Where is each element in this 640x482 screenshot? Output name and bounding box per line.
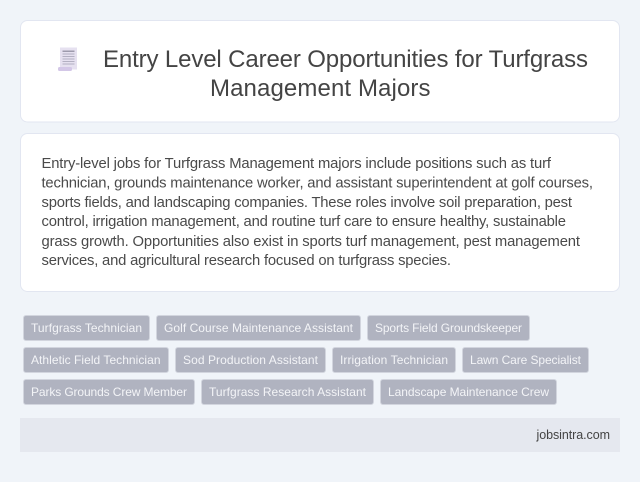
tag: Turfgrass Research Assistant: Turfgrass Research Assistant	[209, 385, 367, 399]
panel: title card	[20, 20, 620, 122]
tag: Sports Field Groundskeeper	[368, 316, 530, 340]
tag: Landscape Maintenance Crew	[380, 380, 556, 404]
tag list	[24, 316, 588, 404]
tag: Irrigation Technician: Irrigation Technician	[340, 353, 448, 367]
description text: grass growth. Opportunities also exist in sports turf management, pest management	[42, 234, 580, 250]
tag: Landscape Maintenance Crew: Landscape Maintenance Crew	[388, 385, 549, 399]
heading: Entry Level Career Opportunities for Turfgrass	[103, 46, 588, 73]
tag: Sports Field Groundskeeper: Sports Field Groundskeeper	[375, 321, 522, 335]
description text: services, and agricultural research focused on turfgrass species.	[42, 253, 451, 269]
tag: Lawn Care Specialist: Lawn Care Specialist	[470, 353, 582, 367]
description text: technician, grounds maintenance worker, and assistant superintendent at golf courses,	[42, 176, 593, 192]
description text: sports fields, and landscaping companies. These roles involve soil preparation, pest	[42, 195, 572, 211]
icon: document scroll	[58, 48, 77, 71]
footer source text: jobsintra.com	[536, 428, 610, 442]
tag: Turfgrass Technician	[24, 316, 150, 340]
tag: Turfgrass Technician: Turfgrass Technician	[31, 321, 142, 335]
tag: Sod Production Assistant	[176, 348, 326, 372]
panel: description card	[20, 134, 620, 292]
tag: Irrigation Technician	[332, 348, 456, 372]
tag: Parks Grounds Crew Member: Parks Grounds Crew Member	[31, 385, 187, 399]
heading	[103, 46, 588, 102]
tag: Lawn Care Specialist	[462, 348, 588, 372]
tag: Golf Course Maintenance Assistant: Golf Course Maintenance Assistant	[164, 321, 354, 335]
description text	[42, 156, 593, 269]
tag: Golf Course Maintenance Assistant	[156, 316, 360, 340]
footer bar	[20, 418, 620, 452]
description text: Entry-level jobs for Turfgrass Management majors include positions such as turf	[42, 156, 552, 172]
tag: Parks Grounds Crew Member	[24, 380, 194, 404]
tag: Sod Production Assistant: Sod Production Assistant	[183, 353, 319, 367]
tag: Athletic Field Technician: Athletic Field Technician	[31, 353, 160, 367]
tag: Turfgrass Research Assistant	[202, 380, 374, 404]
heading: Management Majors	[210, 75, 430, 102]
description text: control, irrigation management, and routine turf care to ensure healthy, sustainable	[42, 214, 566, 230]
tag: Athletic Field Technician	[24, 348, 168, 372]
